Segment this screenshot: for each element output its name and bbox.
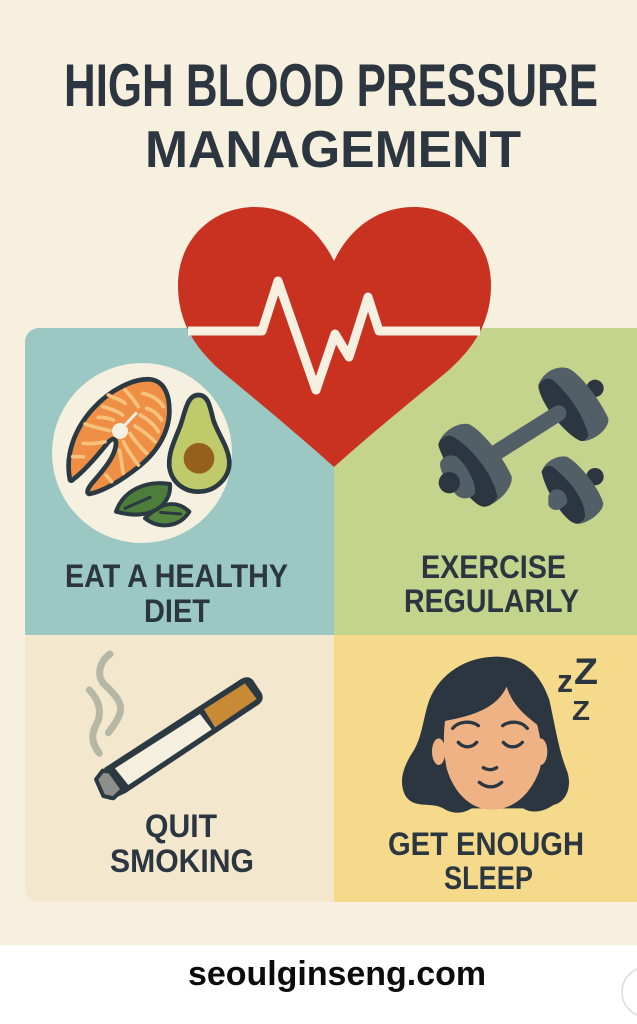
icon: cigarette with smoke (89, 654, 262, 799)
label: get enough sleep (388, 826, 584, 896)
website footer: seoulginseng.com (188, 955, 486, 993)
title: MANAGEMENT (145, 121, 521, 179)
icon: avocado (169, 395, 229, 492)
label: exercise regularly: REGULARLY (404, 583, 579, 619)
icon: sleeping woman (402, 657, 569, 813)
icon: zzz: Z (574, 651, 598, 692)
label: quit smoking (110, 808, 254, 879)
panel: get enough sleep (334, 635, 637, 902)
icon: ECG pulse line (188, 281, 480, 390)
icon: zzz: z (557, 663, 573, 699)
title (64, 52, 598, 179)
heart with ECG line (178, 207, 491, 467)
icon: zzz: Z (572, 695, 590, 726)
icon: heart (178, 207, 491, 467)
icon: dumbbells (438, 367, 608, 524)
label: get enough sleep: GET ENOUGH (388, 826, 584, 862)
icon: zzz (557, 651, 598, 726)
label: quit smoking: SMOKING (110, 843, 254, 879)
label: get enough sleep: SLEEP (444, 860, 533, 896)
icon: salmon steak (69, 379, 169, 494)
icon: healthy food plate (52, 363, 232, 543)
panel: eat a healthy diet (25, 328, 334, 635)
label: eat a healthy diet (65, 558, 288, 629)
panel: exercise regularly (334, 328, 637, 635)
label: exercise regularly (404, 549, 579, 619)
label: quit smoking: QUIT (145, 808, 217, 844)
icon: spinach leaves (116, 483, 189, 525)
label: eat a healthy diet: EAT A HEALTHY (65, 558, 288, 594)
website footer (0, 945, 637, 1024)
panel: quit smoking (25, 635, 334, 902)
label: exercise regularly: EXERCISE (421, 549, 566, 585)
label: eat a healthy diet: DIET (144, 593, 210, 629)
